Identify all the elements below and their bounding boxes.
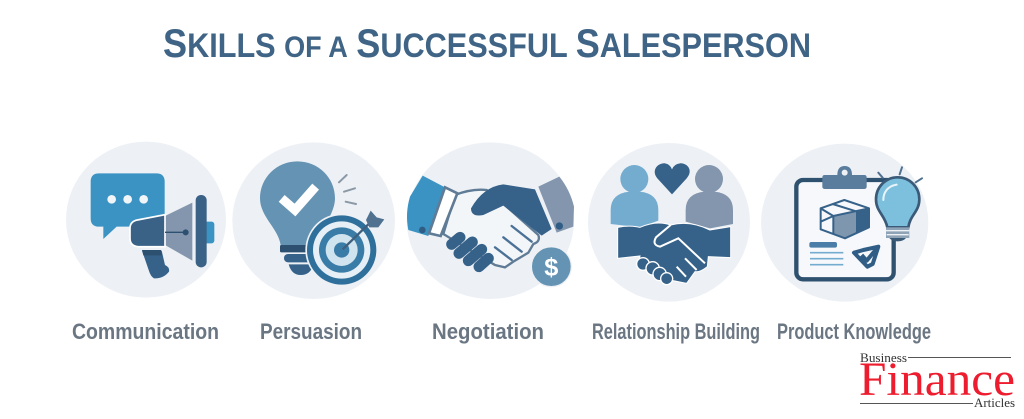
clipboard bbox=[796, 180, 894, 279]
dollar coin: $ bbox=[544, 254, 558, 282]
icon: product knowledge bbox=[761, 144, 928, 302]
clasped hands bbox=[618, 223, 731, 285]
dollar coin bbox=[531, 247, 571, 287]
label: relationship building: Relationship Building bbox=[592, 319, 760, 344]
box bbox=[821, 200, 869, 238]
label: product knowledge: Product Knowledge bbox=[777, 319, 931, 344]
label: negotiation: Negotiation bbox=[432, 319, 544, 344]
light bulb bbox=[260, 161, 335, 245]
speech bubble bbox=[91, 173, 165, 239]
icon: communication bbox=[66, 142, 226, 298]
logo: Business Finance Articles: Finance bbox=[859, 353, 1015, 406]
megaphone bbox=[130, 195, 207, 278]
icon: persuasion bbox=[232, 142, 395, 299]
fingers bbox=[452, 237, 488, 267]
light bulb bbox=[876, 167, 922, 241]
label: communication: Communication bbox=[72, 319, 219, 344]
left person bbox=[611, 165, 658, 227]
text lines bbox=[809, 242, 837, 248]
heart bbox=[655, 163, 690, 194]
check badge bbox=[854, 247, 878, 267]
icon: negotiation bbox=[407, 142, 574, 299]
left hand bbox=[443, 190, 539, 267]
logo: Business Finance Articles: Articles bbox=[974, 395, 1015, 410]
title: SKILLS OF A SUCCESSFUL SALESPERSON bbox=[163, 22, 811, 66]
icon: relationship building bbox=[588, 143, 750, 302]
cuffs bbox=[407, 176, 445, 236]
logo: Business Finance Articles: Business bbox=[860, 350, 907, 365]
right person bbox=[686, 165, 733, 228]
target with arrow bbox=[305, 211, 384, 286]
label: persuasion: Persuasion bbox=[260, 319, 362, 344]
right hand bbox=[471, 184, 552, 236]
